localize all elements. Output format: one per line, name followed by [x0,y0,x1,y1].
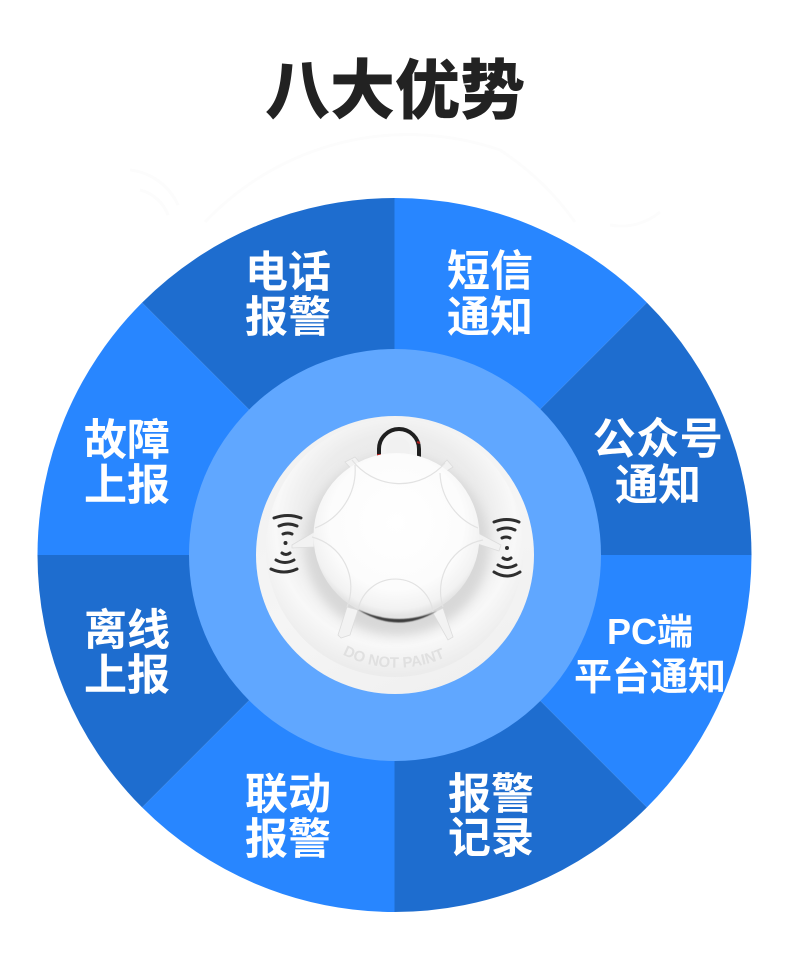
segment: PC端平台通知: PC端 [607,611,693,652]
segment: 报警记录: 记录 [448,815,534,863]
wheel of eight advantages [38,198,752,912]
segment: 离线上报 [38,555,394,807]
U-shaped indicator loop [377,429,420,461]
segment: 短信通知: 短信 [447,248,533,296]
title: 八大优势 [265,54,525,127]
segment: 离线上报: 离线 [84,607,170,655]
segment: 报警记录 [394,555,647,912]
wifi marks, right [494,520,520,576]
inner light blue disc [189,349,601,761]
segment: 短信通知 [394,198,647,555]
smoke detector device [256,416,534,694]
segment: PC端平台通知: 平台通知 [574,657,726,699]
legs [292,457,501,640]
segment: 离线上报: 上报 [84,652,170,700]
segment: PC端平台通知 [394,555,752,807]
dome arcs [312,460,483,612]
segment: 故障上报 [38,303,394,555]
segment: 电话报警: 报警 [245,294,331,342]
segment: 电话报警 [142,198,394,555]
segment: 联动报警 [142,555,394,912]
segment: 故障上报: 故障 [84,417,170,465]
segment: 联动报警: 报警 [245,816,331,864]
segment: 短信通知: 通知 [447,294,533,342]
detector base [256,416,534,694]
wifi marks, left [271,516,301,572]
segment: 公众号通知 [394,303,752,555]
segment: 联动报警: 联动 [245,771,331,819]
segment: 报警记录: 报警 [448,771,534,819]
dome [314,453,480,619]
segment: 公众号通知: 公众号 [593,416,723,464]
embossed label: DO NOT PAINT [344,646,442,668]
dark gap under dome [357,609,437,623]
faint signal arcs behind the wheel [130,135,660,226]
segment: 公众号通知: 通知 [615,462,701,510]
segment: 故障上报: 上报 [84,462,170,510]
segment: 电话报警: 电话 [245,249,331,297]
